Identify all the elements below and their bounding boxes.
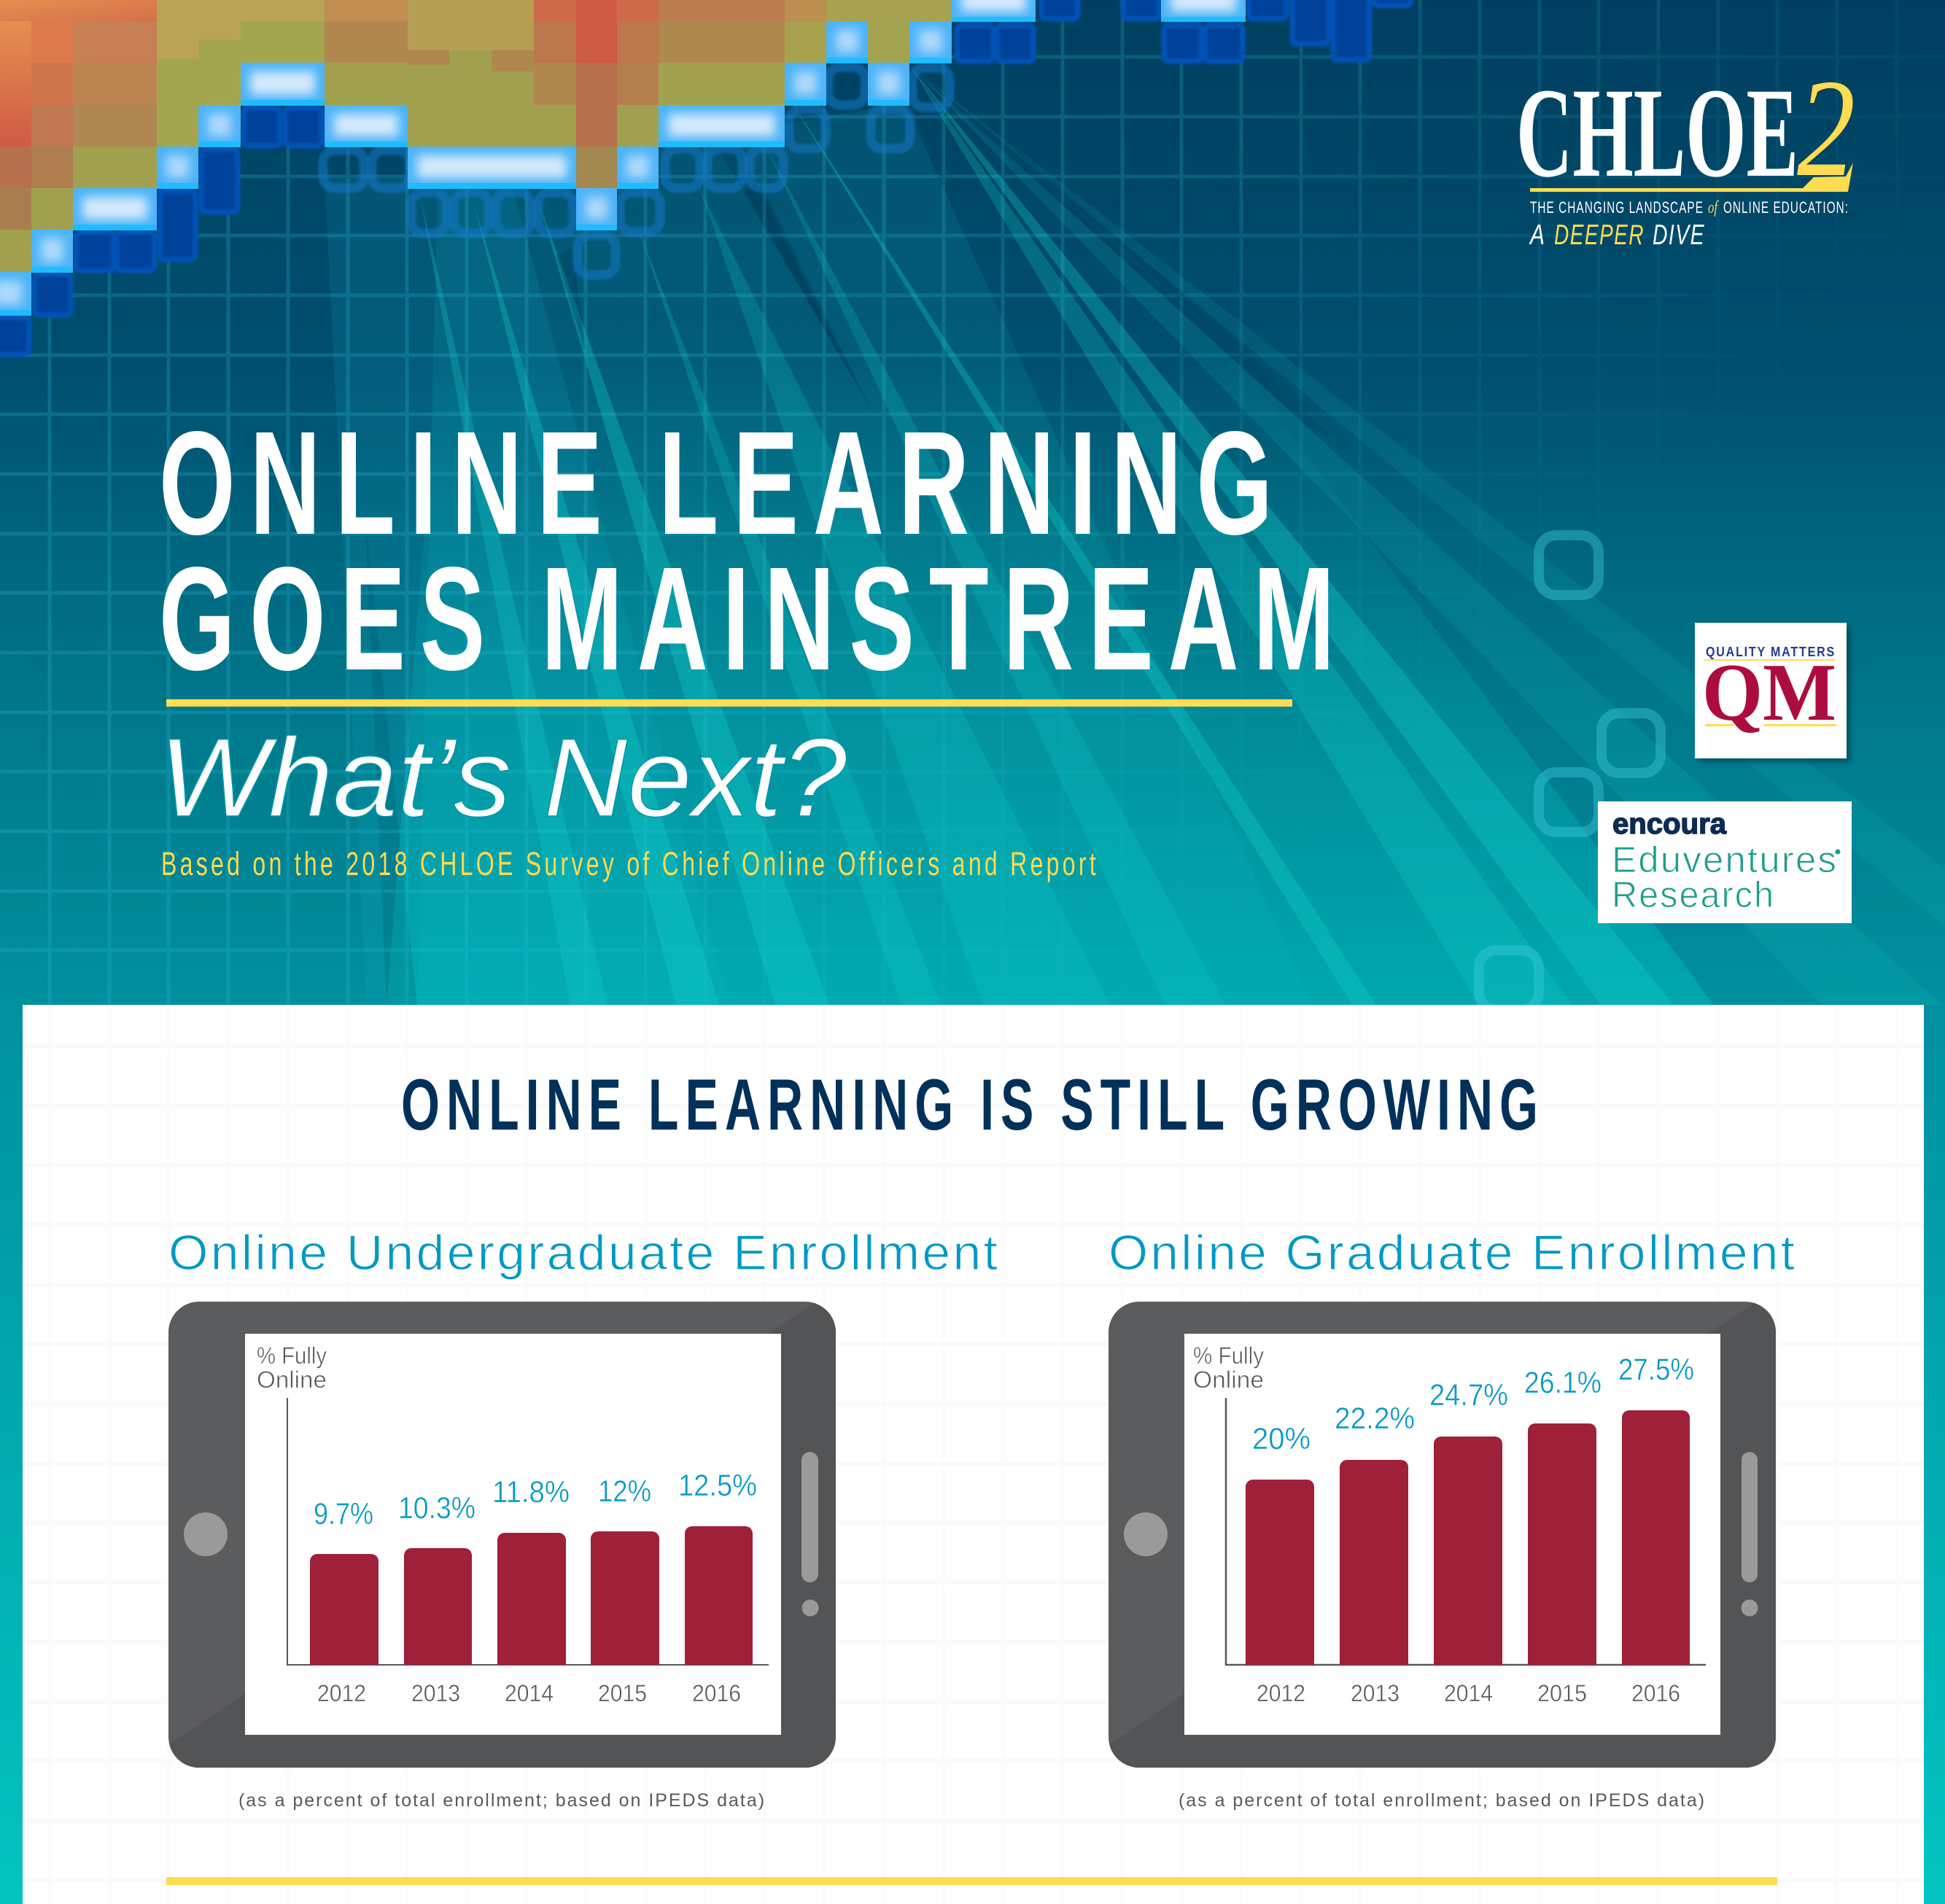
- tablet chart: undergraduate enrollment: [168, 1302, 836, 1768]
- tablet chart: graduate enrollment: 2015: [1537, 1680, 1587, 1706]
- tablet chart: undergraduate enrollment: 2014: [505, 1680, 554, 1706]
- tablet chart: graduate enrollment: 2012: [1257, 1680, 1305, 1706]
- tablet chart: undergraduate enrollment: 9.7%: [314, 1496, 373, 1531]
- logo: CHLOE 2: DIVE: [1653, 219, 1705, 251]
- tablet chart: undergraduate enrollment: 10.3%: [398, 1491, 475, 1525]
- logo: CHLOE 2: DEEPER: [1554, 219, 1645, 251]
- logo: Encoura Eduventures Research: Eduventures: [1612, 839, 1838, 880]
- tablet chart: undergraduate enrollment: 2015: [598, 1680, 647, 1706]
- source line: Based on the 2018 CHLOE Survey of Chief Online Officers and Report: [161, 845, 1099, 882]
- logo: CHLOE 2: ONLINE EDUCATION:: [1723, 198, 1849, 217]
- tablet chart: graduate enrollment: % Fully: [1193, 1342, 1264, 1369]
- tablet chart: graduate enrollment: 27.5%: [1618, 1352, 1694, 1386]
- tablet chart: graduate enrollment: 2014: [1444, 1680, 1493, 1706]
- logo: Quality Matters: [1695, 623, 1847, 758]
- decorative rounded squares: [1479, 535, 1661, 1010]
- tablet chart: graduate enrollment: 24.7%: [1429, 1378, 1508, 1412]
- title rule: [166, 699, 1292, 707]
- heading: undergraduate: Online Undergraduate Enrollment: [168, 1225, 1000, 1281]
- tablet chart: graduate enrollment: 2016: [1631, 1680, 1680, 1706]
- tablet chart: undergraduate enrollment: 12.5%: [678, 1468, 757, 1502]
- tablet chart: undergraduate enrollment: 2013: [411, 1680, 460, 1706]
- tablet chart: undergraduate enrollment: 11.8%: [492, 1474, 570, 1509]
- tablet chart: graduate enrollment: [1109, 1302, 1776, 1768]
- logo: Quality Matters: QUALITY MATTERS: [1706, 645, 1836, 659]
- panel: online learning is still growing: [23, 1005, 1924, 1904]
- title: ONLINE LEARNING: [159, 400, 1287, 565]
- logo: CHLOE 2: [1516, 50, 1855, 251]
- logo: CHLOE 2: 2: [1797, 50, 1855, 206]
- light rays: [325, 66, 1945, 1005]
- tablet chart: graduate enrollment: 20%: [1252, 1421, 1311, 1456]
- caption: graduate: (as a percent of total enrollment; based on IPEDS data): [1179, 1790, 1706, 1811]
- tablet chart: undergraduate enrollment: Online: [257, 1367, 327, 1393]
- subtitle: What's Next?: What’s Next?: [159, 715, 847, 840]
- logo: CHLOE 2: of: [1708, 198, 1719, 217]
- tablet chart: graduate enrollment: 26.1%: [1524, 1365, 1602, 1399]
- tablet chart: undergraduate enrollment: % Fully: [257, 1342, 327, 1369]
- background grid: [0, 0, 1945, 1005]
- tablet chart: graduate enrollment: 2013: [1351, 1680, 1399, 1706]
- heading: graduate: Online Graduate Enrollment: [1109, 1225, 1797, 1281]
- tablet chart: graduate enrollment: Online: [1193, 1367, 1264, 1393]
- logo: Encoura Eduventures Research: [1598, 801, 1852, 923]
- logo: Quality Matters: QM: [1702, 648, 1836, 738]
- pixel mosaic: [0, 0, 952, 272]
- dark blue pixel cells: [0, 0, 1410, 354]
- caption: undergraduate: (as a percent of total enrollment; based on IPEDS data): [238, 1790, 766, 1811]
- tablet chart: undergraduate enrollment: 2012: [317, 1680, 366, 1706]
- logo: Encoura Eduventures Research: Research: [1612, 874, 1775, 915]
- bottom rule: [166, 1877, 1777, 1885]
- glowing pixel cells: [0, 0, 1246, 316]
- logo: Encoura Eduventures Research: encoura: [1612, 808, 1727, 840]
- logo: CHLOE 2: THE CHANGING LANDSCAPE: [1530, 198, 1704, 217]
- title: [159, 400, 1349, 701]
- tablet chart: undergraduate enrollment: 2016: [692, 1680, 741, 1706]
- title: GOES MAINSTREAM: [159, 536, 1349, 701]
- hollow blue pixel cells: [323, 67, 950, 275]
- tablet chart: graduate enrollment: 22.2%: [1335, 1401, 1415, 1435]
- tablet chart: undergraduate enrollment: 12%: [598, 1474, 651, 1508]
- logo: CHLOE 2: A: [1529, 219, 1545, 251]
